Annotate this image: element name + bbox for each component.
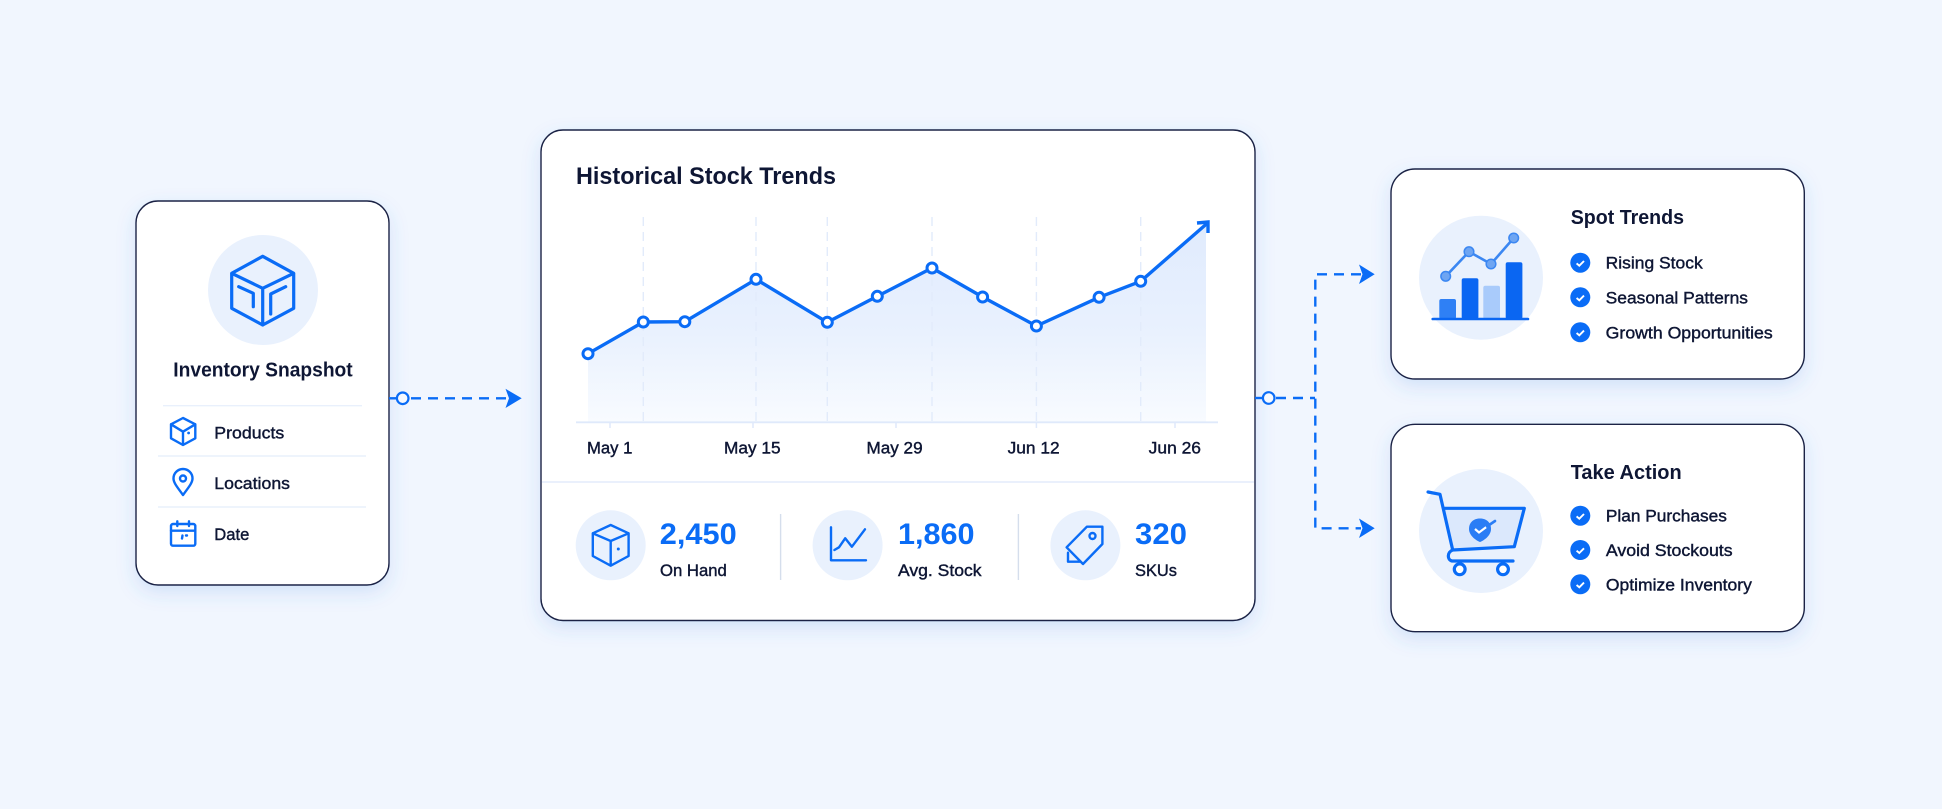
stat: average stock xyxy=(813,510,982,580)
stat: on hand xyxy=(576,510,737,580)
row: products: Products xyxy=(214,424,284,442)
checklist: take action xyxy=(1570,506,1753,594)
heading: inventory snapshot: Inventory Snapshot xyxy=(173,359,353,382)
row: date: Date xyxy=(214,526,249,544)
line chart: May 29 xyxy=(866,439,923,457)
panel: take action xyxy=(1391,424,1804,632)
checklist: spot trends xyxy=(1570,253,1773,342)
icon: bar and line chart xyxy=(1419,216,1543,340)
checklist: take action: Optimize Inventory xyxy=(1606,576,1753,594)
line chart: Jun 26 xyxy=(1149,439,1201,457)
heading: take action: Take Action xyxy=(1571,461,1682,484)
stat: average stock: 1,860 xyxy=(898,518,974,551)
checklist: take action: Avoid Stockouts xyxy=(1606,542,1733,560)
stat: on hand: On Hand xyxy=(660,562,727,580)
icon: large box xyxy=(208,235,318,345)
icon: shopping cart xyxy=(1419,469,1543,593)
row: products xyxy=(171,418,284,445)
arrow: snapshot to trends xyxy=(389,389,522,408)
checklist: spot trends: Seasonal Patterns xyxy=(1606,289,1748,307)
row: locations xyxy=(174,469,290,495)
heading: historical stock trends: Historical Stock Trends xyxy=(576,163,836,190)
checklist: take action: Plan Purchases xyxy=(1606,508,1727,526)
line chart: May 15 xyxy=(724,439,781,457)
checklist: spot trends: Growth Opportunities xyxy=(1606,324,1773,342)
stat: skus: SKUs xyxy=(1135,562,1177,580)
panel: inventory snapshot xyxy=(136,201,389,585)
panel: historical stock trends xyxy=(541,130,1255,620)
panel: spot trends xyxy=(1391,169,1804,379)
stat: skus: 320 xyxy=(1135,518,1187,551)
line chart xyxy=(576,217,1218,457)
row: locations: Locations xyxy=(214,475,290,493)
checklist: spot trends: Rising Stock xyxy=(1606,254,1703,272)
arrow: trends to outcomes xyxy=(1255,264,1375,538)
line chart: Jun 12 xyxy=(1008,439,1060,457)
stat: on hand: 2,450 xyxy=(660,518,737,551)
heading: spot trends: Spot Trends xyxy=(1571,206,1684,229)
line chart: May 1 xyxy=(587,439,632,457)
stat: average stock: Avg. Stock xyxy=(898,562,982,580)
row: date xyxy=(171,521,249,546)
stat: skus xyxy=(1050,510,1187,580)
